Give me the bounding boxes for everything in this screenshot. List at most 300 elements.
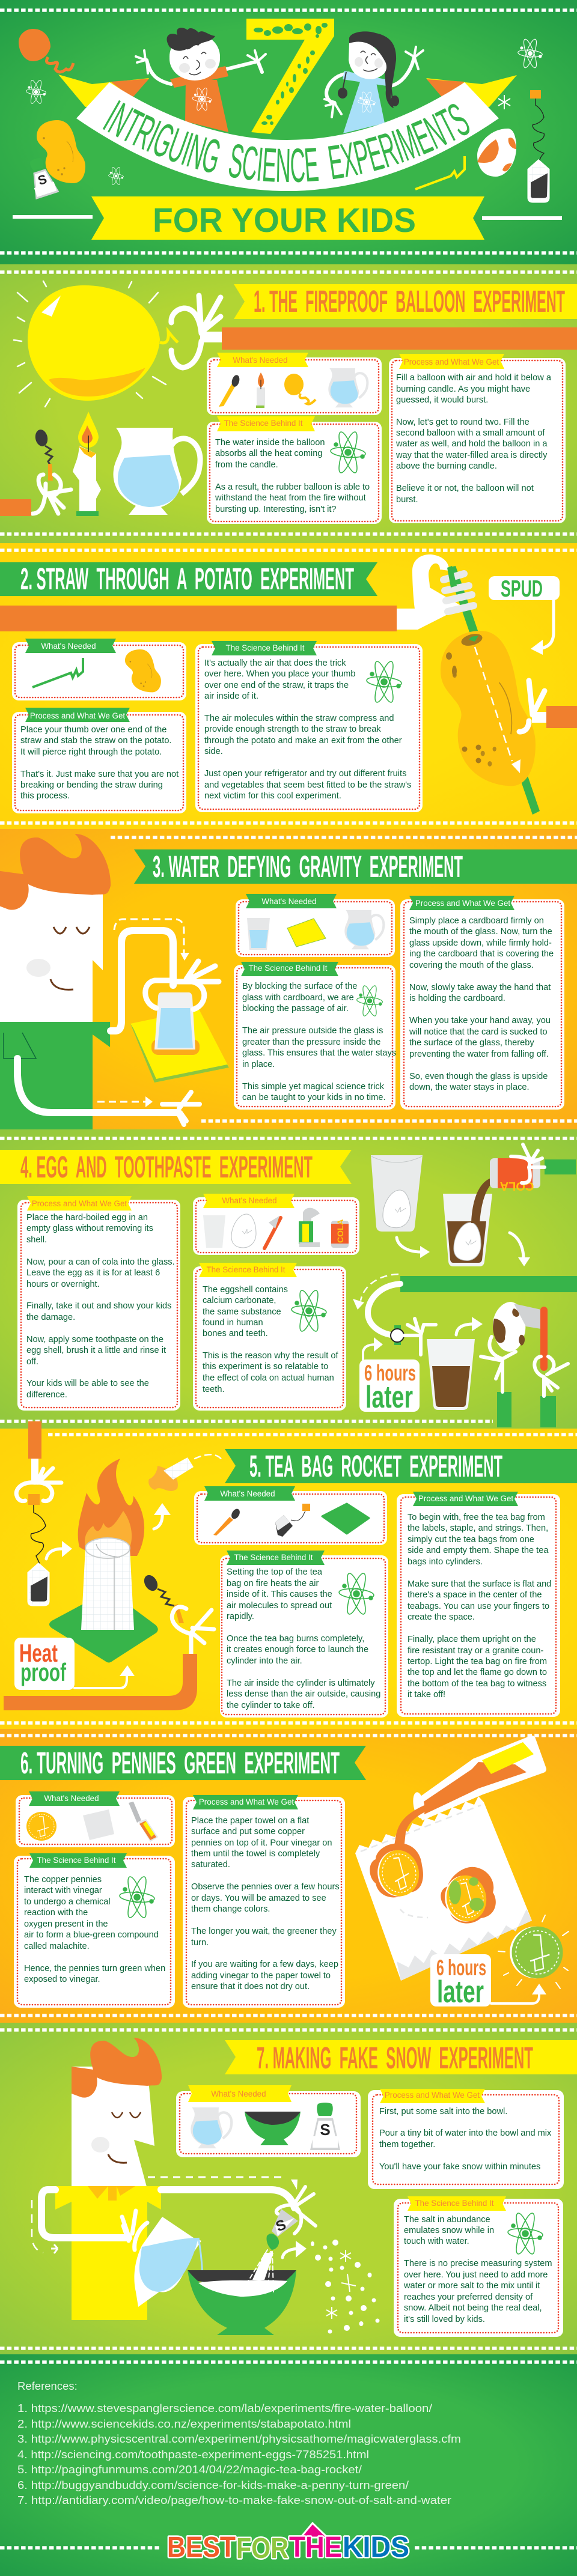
section 4: arrow one [397, 1238, 421, 1252]
section 3 panel: process: covering the mouth of the glass. [409, 961, 534, 970]
section 5: flying tea bag [148, 1454, 224, 1491]
icon: jug [328, 368, 367, 407]
section 7: mixing bowl [188, 2270, 296, 2335]
section 2 panel: science: provide enough strength to the straw to break [204, 724, 381, 734]
section 1 panel: science: bursting up. Interesting, isn't it? [215, 505, 337, 514]
icon: balloon [284, 374, 316, 404]
section 6 panel: science: reaction with the [24, 1908, 88, 1918]
section 1 panel: science: from the candle. [215, 460, 278, 470]
icon: atom [330, 430, 366, 475]
section 7 panel: what's needed [176, 2085, 361, 2157]
section 4: egg and toothbrush [481, 1302, 568, 1427]
section 6 panel: science: exposed to vinegar. [24, 1975, 100, 1984]
header: for your kids ribbon: FOR YOUR KIDS [153, 201, 416, 240]
icon: toothbrush [264, 1216, 281, 1248]
section 1: big balloon [14, 281, 178, 407]
section 4 panel: process: Place the hard-boiled egg in an [26, 1213, 148, 1223]
section 1 panel: science: withstand the heat from the fire without [215, 493, 366, 503]
section 7 panel: process: First, put some salt into the bowl. [379, 2107, 507, 2116]
section 5 panel: science: The air inside the cylinder is ultimately [227, 1678, 375, 1688]
background: section 6 band [0, 1729, 577, 2023]
section 1 panel: science: The water inside the balloon [215, 438, 325, 448]
section 1 panel: process: guessed, it would burst. [396, 395, 488, 405]
icon: potato [125, 649, 161, 692]
section 3 panel: process: glass upside down, while firmly hold- [409, 938, 552, 948]
section 6: six hours later label: later [437, 1975, 484, 2009]
icon: atom [366, 660, 402, 704]
section 6 panel: science: oxygen present in the [24, 1919, 108, 1929]
section 1: hand holding balloon [171, 296, 222, 368]
section 4 panel: process: shell. [26, 1235, 47, 1245]
section 7 panel: science: The salt in abundance [404, 2215, 490, 2225]
section 4 panel: process: egg shell, brush it a little and rinse it [26, 1346, 166, 1355]
section 4: arrow three [363, 1337, 383, 1359]
section 6 panel: process: Process and What We Get [199, 1797, 294, 1806]
section 2 panel: process: breaking or bending the straw during [20, 780, 163, 790]
section 6 panel: science: Hence, the pennies turn green when [24, 1964, 165, 1973]
section 6 panel: science: air to form a blue-green compound [24, 1930, 159, 1940]
section 1 panel: science [207, 416, 382, 524]
icon: atom [119, 1875, 155, 1919]
background: section 7 band [0, 2023, 577, 2354]
section 1 panel: process: water as well, and hold the balloon in a [395, 439, 548, 449]
section 4 panel: science: The Science Behind It [206, 1265, 285, 1274]
section 3 panel: what's needed: What's Needed [261, 897, 317, 906]
section 5 panel: what's needed: What's Needed [220, 1489, 275, 1498]
references block [17, 2380, 461, 2506]
icon: jug [344, 910, 383, 949]
section 2 panel: process: Process and What We Get [30, 711, 125, 720]
section 3 panel: process: the surface of the glass, thereby [409, 1038, 534, 1048]
section 4 panel: process [17, 1196, 180, 1411]
section 3 panel: process: down, the water stays in place. [409, 1083, 530, 1092]
references block: 5. http://pagingfunmums.com/2014/04/22/magic-tea-bag-rocket/ [17, 2463, 362, 2476]
section 3 panel: process: preventing the water from falling off. [409, 1050, 549, 1059]
section 2 panel: process: Place your thumb over one end of the [20, 725, 166, 735]
section 5 panel: science: less dense than the air outside, causing [227, 1689, 380, 1699]
section 6 panel: process: Place the paper towel on a flat [191, 1816, 309, 1826]
section 1: candle [73, 412, 101, 516]
section 6 panel: process: them change colors. [191, 1904, 270, 1914]
section 6 panel: process: turn. [191, 1938, 209, 1948]
section 5: heat proof label: proof [20, 1658, 67, 1686]
section 6: green penny [498, 1915, 569, 1988]
section 6 panel: process: If you are waiting for a few days, keep [191, 1960, 338, 1969]
section 4: cola can [490, 1158, 540, 1192]
section 6 panel: what's needed [16, 1791, 175, 1847]
section 7: dashed arrows [32, 2177, 298, 2253]
icon: atom [338, 1572, 374, 1616]
section 4 panel: science [193, 1263, 346, 1411]
section 1 panel: process: second balloon with a small amount of [396, 428, 545, 438]
section 2 panel: process [12, 708, 186, 813]
section 4 panel: science: bones and teeth. [203, 1329, 268, 1338]
section 5 panel: science [220, 1551, 388, 1718]
section 7 panel: process [368, 2089, 564, 2189]
section 5 panel: process: To begin with, free the tea bag from [408, 1513, 545, 1522]
section 6 panel: process: The longer you wait, the greener they [191, 1927, 337, 1936]
icon: egg [231, 1214, 256, 1248]
section 3 panel: process: When you take your hand away, you [409, 1016, 551, 1025]
section 3 panel: science: The air pressure outside the glass is [242, 1026, 383, 1036]
references block: References: [17, 2380, 78, 2392]
section 7 panel: process: You'll have your fake snow within minutes [379, 2162, 540, 2172]
icon: penny [25, 1812, 56, 1841]
section 3 panel: process: So, even though the glass is upside [409, 1072, 548, 1081]
section 7: falling snow [311, 2240, 380, 2333]
section 5 panel: science: The Science Behind It [234, 1553, 313, 1562]
section 5: cylinder [81, 1538, 134, 1630]
section 4 panel: science: the same substance [203, 1307, 281, 1317]
section 4 panel: what's needed [193, 1194, 359, 1255]
section 6 panel: process: them until the towel is completely [191, 1849, 320, 1859]
background: section 4 band [0, 1129, 577, 1429]
section 5 panel: process: it take off! [408, 1690, 445, 1700]
section 5 panel: what's needed [194, 1486, 387, 1545]
section 4: glass with cola [443, 1177, 493, 1266]
section 2 panel: science: air inside of it. [204, 691, 258, 701]
section 2 panel: science: It's actually the air that does the trick [204, 658, 346, 668]
section 3: man [0, 834, 111, 1129]
section 1 panel: process: Believe it or not, the balloon will not [396, 484, 534, 493]
section 3 panel: science: greater than the pressure inside the [242, 1037, 380, 1047]
section 2 panel: science: The air molecules within the straw compress and [204, 714, 394, 723]
section 2 panel: what's needed [12, 639, 186, 700]
section 2 title ribbon [0, 562, 377, 596]
section 6: arrow [491, 1984, 546, 2003]
section 5 panel: process: Finally, place them upright on the [408, 1635, 536, 1644]
section 7 panel: science: it's still loved by kids. [404, 2315, 485, 2324]
section 4 panel: process: difference. [26, 1390, 67, 1400]
section 5: arrow from label [75, 1665, 135, 1688]
section 2 panel: science: The Science Behind It [225, 643, 305, 652]
section 2: spud label [489, 576, 560, 655]
section 6 panel: process: pennies on top of it. Pour vinegar on [191, 1838, 332, 1848]
header icon: orange balloon [19, 29, 73, 72]
section 6 panel: what's needed: What's Needed [44, 1794, 99, 1803]
section 7: arms [41, 2190, 295, 2238]
section 5 panel: science: the cylinder to take off. [227, 1701, 315, 1710]
section 3 panel: science [234, 962, 396, 1110]
section 6 panel: science: The Science Behind It [37, 1856, 116, 1865]
references block: 4. http://sciencing.com/toothpaste-experiment-eggs-7785251.html [17, 2448, 369, 2461]
section 5 panel: process: fire resistant tray or a granite coun- [408, 1646, 543, 1656]
section 1 panel: science: absorbs all the heat coming [215, 449, 322, 458]
icon: glass [203, 1215, 225, 1248]
section 7: salt shaker pouring: S [273, 2217, 288, 2235]
section 3 panel: process: ing the cardboard that is covering the [409, 949, 554, 959]
section 3: glass of water [154, 992, 195, 1050]
section 6 panel: science [14, 1853, 175, 2008]
section 3: dashed arrows [97, 919, 189, 1107]
section 6 panel: science: interact with vinegar [24, 1886, 102, 1895]
section 3 panel: science: This simple yet magical science trick [242, 1082, 385, 1092]
section 4 panel: process: the damage. [26, 1313, 75, 1322]
icon: atom [507, 2211, 543, 2256]
icon: cola can: COLA [335, 1219, 345, 1243]
references block: 2. http://www.sciencekids.co.nz/experiments/stabapotato.html [17, 2417, 351, 2430]
section 5 panel: science: Once the tea bag burns completely, [227, 1634, 364, 1644]
header illustration: boy [136, 28, 266, 132]
section 6 panel: process: ensure that it does not dry out. [191, 1982, 310, 1991]
header: white curved banner [76, 82, 499, 191]
section 2: orange arm band [0, 606, 397, 631]
section 2 panel: science: side. [204, 747, 223, 756]
icon: atom [291, 1289, 327, 1333]
header illustration: girl [325, 31, 423, 133]
section 1 panel: science: As a result, the rubber balloon is able to [215, 482, 370, 492]
section 1 panel: process: burst. [396, 495, 418, 505]
section 3 panel: process [400, 896, 564, 1110]
section 4 panel: what's needed: What's Needed [222, 1196, 277, 1205]
section 4 panel: process: Now, apply some toothpaste on the [26, 1335, 163, 1344]
icon: bowl [245, 2112, 301, 2145]
section 3 panel: science: glass with cardboard, we are [242, 993, 354, 1003]
section 1 panel: process: Process and What We Get [404, 357, 499, 366]
section 4: six hours later label: 6 hours [364, 1361, 416, 1385]
references block: 6. http://buggyandbuddy.com/science-for-kids-make-a-penny-turn-green/ [17, 2479, 409, 2491]
section 5 panel: process: bags into cylinders. [408, 1557, 483, 1567]
section 1: water jug [113, 428, 200, 515]
section 7 panel: science: over here. You just need to add more [404, 2270, 548, 2280]
section 4: hand on can [511, 1144, 576, 1183]
section 5 panel: science: Setting the top of the tea [227, 1567, 323, 1577]
header: curved title: INTRIGUING SCIENCE EXPERIMENTS [102, 100, 470, 183]
section 4: six hours later label: later [365, 1380, 413, 1415]
section 5 panel: process: Process and What We Get [418, 1494, 513, 1503]
logo: best for the kids [167, 2523, 409, 2565]
section 6 title ribbon [0, 1746, 366, 1780]
section 5 panel: process: side and empty them. Shape the tea [408, 1546, 549, 1555]
section 4: glass with egg [371, 1155, 423, 1232]
background: footer band [0, 2354, 577, 2576]
references block: 3. http://www.physicscentral.com/experiment/physicsathome/magicwaterglass.cfm [17, 2432, 461, 2445]
section 3: upper arm [111, 931, 173, 1031]
section 1 panel: process: above the burning candle. [396, 461, 497, 471]
header icon: atoms [26, 38, 543, 186]
section 2: potato with straw [441, 566, 540, 815]
header icon: tea bag [528, 90, 549, 202]
section 6 panel: process: Observe the pennies over a few hours [191, 1882, 340, 1892]
references block: 1. https://www.stevespanglerscience.com/lab/experiments/fire-water-balloon/ [17, 2402, 433, 2414]
section 4: arrow four [456, 1317, 483, 1335]
icon: jug [191, 2107, 231, 2148]
section 4 panel: process: Now, pour a can of cola into the glass. [26, 1257, 175, 1267]
section 3: lower arm [17, 1059, 178, 1113]
section 5: arrow up [154, 1503, 171, 1529]
section 6 panel: process: adding vinegar to the paper towel to [191, 1971, 331, 1981]
section 2 panel: science [195, 641, 423, 812]
section 5: orange arm [4, 1654, 197, 1710]
section 1 panel: process: Fill a balloon with air and hold it below a [396, 373, 552, 383]
icon: toothpaste [299, 1208, 320, 1247]
background: section 5 band [0, 1429, 577, 1729]
section 4 panel: process: off. [26, 1357, 38, 1367]
section 7 panel: what's needed: What's Needed [211, 2089, 266, 2098]
header illustration: big number seven [246, 19, 334, 134]
section 2: second hand [519, 681, 577, 732]
background: section 2 band [0, 543, 577, 829]
section 3 panel: science: glass. This ensures that the water stays [242, 1048, 396, 1058]
section 3 panel: process: Now, slowly take away the hand that [409, 983, 551, 992]
section 2 panel: science: over here. When you place your thumb [204, 669, 355, 679]
section 4 panel: science: teeth. [203, 1385, 225, 1394]
section 3 panel: process: Process and What We Get [415, 899, 510, 908]
logo: best for the kids: FOR [236, 2533, 288, 2565]
section 2 panel: what's needed: What's Needed [41, 642, 96, 651]
icon: shaker [310, 2103, 340, 2150]
section 1 panel: process: burning candle. As you might have [396, 384, 530, 394]
section 2 panel: process: That's it. Just make sure that you are not [20, 770, 179, 779]
icon: tea bag [275, 1504, 310, 1537]
section 2: spud label: SPUD [501, 576, 543, 602]
icon: atom [356, 985, 383, 1017]
section 6: penny on paper [374, 1847, 423, 1900]
section 3: hand on glass [145, 961, 219, 1009]
section 4 panel: science: the effect of cola on actual human [203, 1373, 334, 1383]
section 7 panel: process: Pour a tiny bit of water into the bowl and mix [379, 2128, 552, 2138]
section 6 panel: process: saturated. [191, 1860, 230, 1870]
logo: best for the kids: KIDS [343, 2532, 409, 2563]
section 5: tea bag [28, 1564, 49, 1605]
icon: straw [32, 658, 83, 687]
section 3 panel: process: will notice that the card is sucked to [409, 1027, 548, 1037]
icon: glass [247, 918, 270, 950]
section 3 panel: what's needed [236, 894, 395, 957]
icon: tray [322, 1504, 369, 1534]
section 7 panel: science: emulates snow while in [404, 2226, 494, 2235]
section 6 panel: process: or days. You will be amazed to see [191, 1894, 326, 1903]
section 7: man [55, 2038, 162, 2320]
section 4: green arm and watch [353, 1274, 577, 1355]
logo: best for the kids: BEST [167, 2532, 236, 2563]
section 1 panel: process [389, 354, 566, 523]
icon: candle [256, 372, 265, 408]
section 2 panel: process: It will pierce right through the potato. [20, 747, 162, 757]
background: header band [0, 0, 577, 264]
section 4 panel: science: this experiment is so relatable to [203, 1362, 328, 1372]
header icon: snowflake [498, 95, 510, 109]
icon: vinegar bottle [129, 1802, 158, 1842]
section 2 panel: process: straw and stab the straw on the potato. [20, 736, 172, 746]
section 5: flame [78, 1459, 144, 1556]
section 1 panel: science: The Science Behind It [224, 419, 303, 428]
section 6: vinegar bottle [411, 1739, 543, 1819]
section 6 panel: science: called malachite. [24, 1942, 90, 1951]
section 2 panel: science: through the potato and make an exit from the other [204, 736, 402, 746]
section 6: penny turning green [441, 1872, 490, 1925]
section 3: lower hand [162, 1092, 200, 1125]
section 1 panel: process: Now, let's get to round two. Fill the [396, 418, 530, 427]
icon: cardboard [287, 919, 326, 947]
section 5 panel: process: teabags. You can use your fingers to [408, 1602, 549, 1611]
section 6: vinegar stream and puddles [370, 1802, 496, 1924]
background: section 3 band [0, 829, 577, 1129]
section 5 panel: science: cylinder into the air. [227, 1656, 302, 1666]
section 7 panel: process: Process and What We Get [385, 2091, 480, 2100]
section 5 panel: process: the bottom of the tea bag to witness [408, 1679, 546, 1689]
section 5 panel: process: create the space. [408, 1612, 475, 1622]
section 3 panel: process: is holding the cardboard. [409, 994, 505, 1003]
section 2 panel: science: over one end of the straw, it traps the [204, 681, 349, 690]
icon: match [219, 374, 240, 407]
section 3 panel: science: blocking the passage of air. [242, 1004, 349, 1013]
section 4: glass after six hours [427, 1339, 475, 1410]
section 5: arrow [46, 1541, 72, 1559]
section 7 panel: science: touch with water. [404, 2237, 469, 2246]
section 4 title ribbon [0, 1150, 352, 1184]
section 7 panel: science: reaches your preferred density of [404, 2292, 533, 2302]
section 4: cola can: COLA [500, 1179, 534, 1192]
section 4 panel: process: Leave the egg as it is for at least 6 [26, 1268, 160, 1278]
section 4: six hours later label [359, 1359, 420, 1415]
section 5 panel: science: inside of it. This causes the [227, 1590, 332, 1599]
section 2 panel: science: Just open your refrigerator and try out different fruits [204, 769, 406, 779]
section 5 panel: process: simply cut the tea bags from one [408, 1535, 534, 1545]
section 1: hand with match [0, 475, 71, 516]
header: banner folds [58, 41, 517, 108]
section 1 panel: what's needed: What's Needed [233, 356, 288, 365]
section 5 panel: science: rapidly. [227, 1612, 254, 1621]
section 3 panel: science: The Science Behind It [248, 964, 328, 973]
logo: best for the kids: THE [289, 2532, 342, 2563]
section 4 panel: process: hours or overnight. [26, 1280, 100, 1289]
icon: paper towel [83, 1809, 114, 1840]
section 7: salt shaker pouring [243, 2187, 316, 2292]
section 7 panel: science: The Science Behind It [415, 2199, 494, 2208]
section 5: match and hand [141, 1573, 214, 1654]
background: section 1 band [0, 264, 577, 543]
icon: cola can [331, 1219, 349, 1248]
section 3 panel: science: can be taught to your kids in no time. [242, 1093, 386, 1102]
section 5 panel: science: bag on fire heats the air [227, 1579, 319, 1588]
header icon: potato [37, 120, 85, 183]
section 3 panel: process: Simply place a cardboard firmly on [409, 916, 544, 926]
section 6 panel: process: surface and put some copper [191, 1827, 305, 1836]
header: for your kids ribbon [91, 196, 484, 240]
section 6: six hours later label [430, 1954, 491, 2009]
section 5: arm holding tea bag tag [16, 1421, 61, 1564]
section 7 panel: science: water or more salt to the mix until it [403, 2281, 540, 2291]
section 5: heat proof label: Heat [19, 1639, 58, 1667]
section 6: paper towel [355, 1796, 532, 1981]
section 4 panel: process: empty glass without removing its [26, 1224, 153, 1233]
icon: match [213, 1507, 242, 1536]
section 7 panel: science: snow. Albeit not being the real deal, [404, 2303, 542, 2313]
section 4 panel: science: This is the reason why the result of [203, 1351, 338, 1361]
references block: 7. http://antidiary.com/video/page/how-to-make-fake-snow-out-of-salt-and-water [17, 2494, 451, 2506]
section 4 panel: process: Finally, take it out and show your kids [26, 1301, 171, 1311]
section 5 panel: process [397, 1492, 560, 1717]
section 7: arrow [282, 2241, 307, 2258]
section 6: six hours later label: 6 hours [436, 1955, 486, 1980]
section 3: cardboard [130, 1009, 229, 1083]
section 5 panel: process: the labels, staple, and strings. Then, [408, 1523, 548, 1533]
section 2: hand holding straw [397, 554, 474, 630]
section 5 panel: process: the top and let the flame go down to [408, 1668, 547, 1677]
section 4 panel: process: Your kids will be able to see the [26, 1379, 149, 1388]
section 1 panel: what's needed [207, 353, 382, 415]
section 5: tray [49, 1590, 158, 1663]
section 6 panel: process [183, 1795, 345, 2008]
section 5: heat proof label [14, 1638, 75, 1690]
section 4 panel: science: found in human [203, 1318, 263, 1328]
section 7: jug pouring [122, 2211, 203, 2307]
header icon: straw [415, 156, 465, 189]
section 5 panel: process: tertop. Light the tea bag on fire from [408, 1657, 547, 1666]
section 2 panel: science: next victim for this cool experiment. [204, 791, 341, 801]
section 6 panel: science: to undergo a chemical [24, 1897, 111, 1907]
